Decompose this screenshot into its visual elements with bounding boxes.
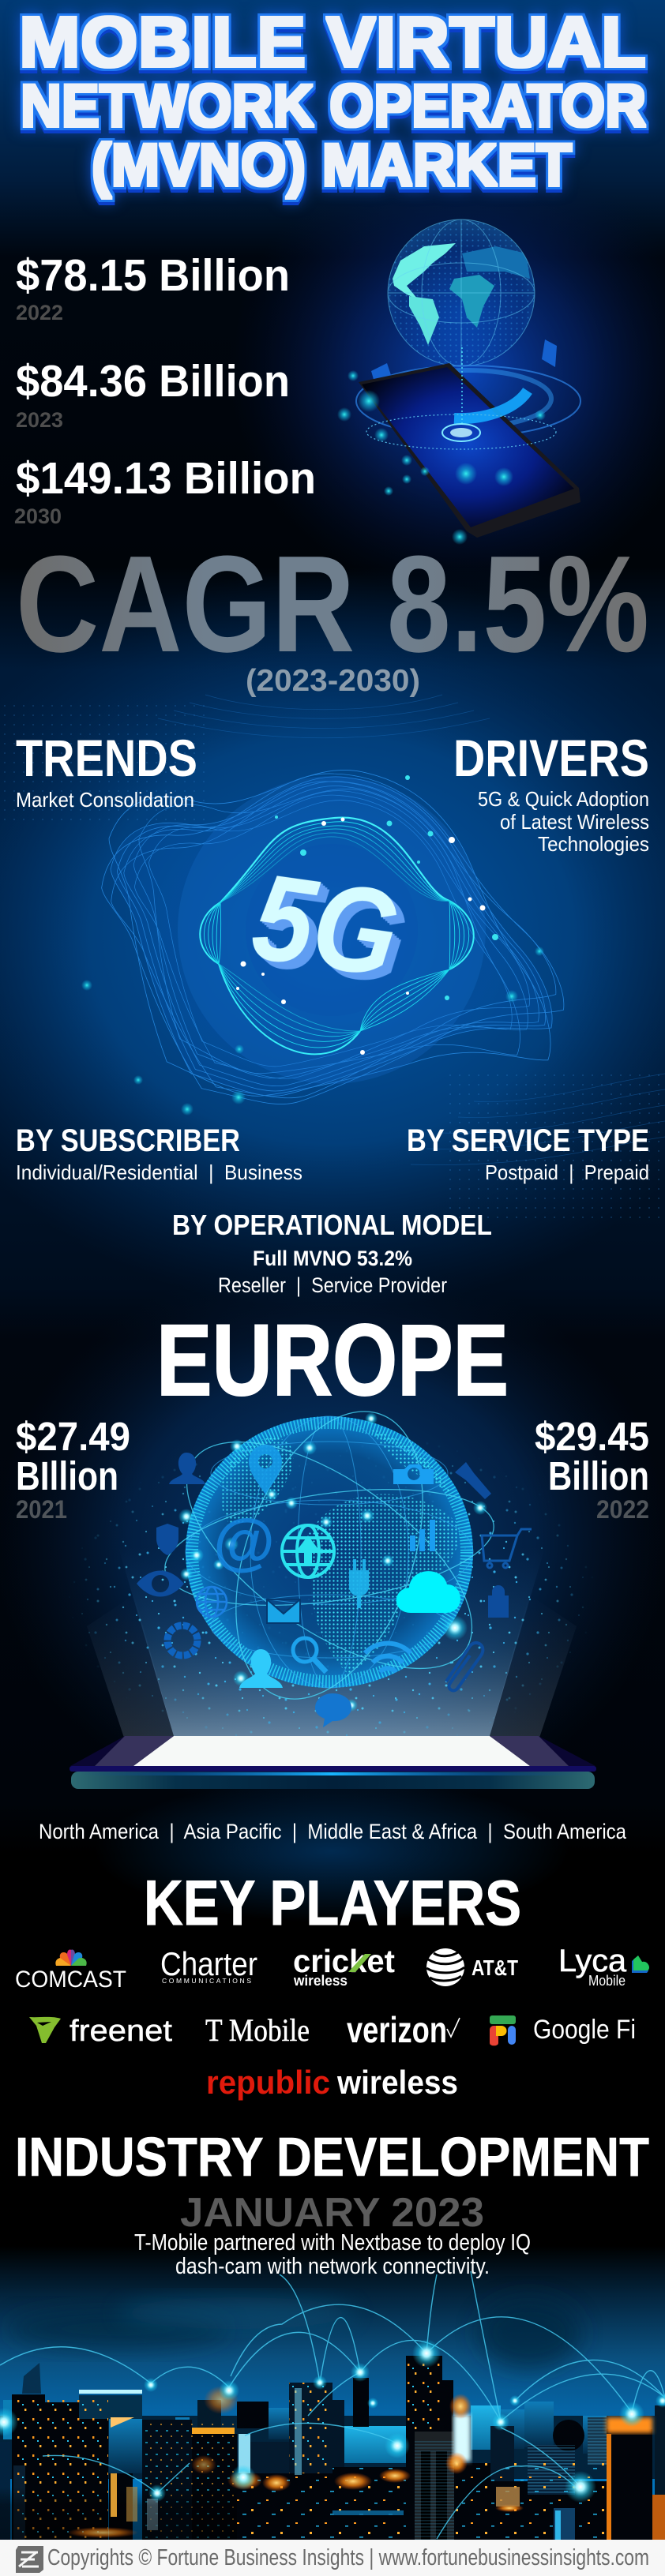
- market value 2023: 2023: [16, 408, 63, 432]
- panel: by operational model: BY OPERATIONAL MODEL: [172, 1209, 492, 1241]
- icon: lock: [489, 1586, 508, 1617]
- panel: drivers: [453, 729, 649, 856]
- panel: by subscriber: Individual/Residential | Business: [16, 1161, 302, 1184]
- title: MOBILE VIRTUAL: [19, 3, 646, 82]
- icon: envelope: [267, 1599, 300, 1623]
- dark buildings: [0, 2356, 665, 2540]
- icon: at sign: @: [213, 1506, 275, 1577]
- Europe value 2022: $29.45: [535, 1414, 649, 1459]
- title: [19, 3, 646, 199]
- logo: Verizon: verizon: [347, 2009, 447, 2050]
- development text: [134, 2230, 531, 2279]
- market value 2030: $149.13 Billion: [16, 453, 316, 504]
- market value 2022: 2022: [16, 301, 63, 324]
- Europe value 2021: 2021: [16, 1495, 67, 1524]
- logo: Freenet: freenet: [70, 2015, 172, 2048]
- market value 2030: [14, 453, 316, 528]
- icon: Fortune Business Insights logo: [16, 2546, 43, 2573]
- logo: T-Mobile: T Mobile: [205, 2012, 310, 2048]
- logo: Google Fi: [490, 2015, 636, 2045]
- logo: AT&T: AT&T: [472, 1955, 518, 1980]
- title: NETWORK OPERATOR: [21, 73, 646, 140]
- logo: Lyca Mobile: [558, 1944, 649, 1989]
- panel: trends: TRENDS: [16, 729, 197, 787]
- heading: key players: KEY PLAYERS: [144, 1868, 521, 1939]
- logo: Lyca Mobile: Mobile: [588, 1973, 626, 1989]
- concentric discs: [178, 776, 486, 1084]
- icon: chat bubble: [315, 1693, 351, 1727]
- building windows: [12, 2360, 607, 2540]
- Europe value 2021: [16, 1414, 130, 1524]
- phone hologram details: [337, 347, 556, 545]
- icon: eye: [137, 1571, 184, 1596]
- icon: paperclip: [446, 1643, 483, 1690]
- panel: drivers: of Latest Wireless: [500, 810, 649, 834]
- footer: [0, 2540, 665, 2576]
- logo: Lyca Mobile: Lyca: [558, 1944, 627, 1978]
- icon: bars: [410, 1520, 435, 1551]
- market value 2022: [16, 250, 290, 324]
- panel: by operational model: Full MVNO 53.2%: [253, 1247, 412, 1270]
- 5G lettering: 5G: [245, 847, 407, 1003]
- panel: by subscriber: BY SUBSCRIBER: [16, 1123, 240, 1158]
- market value 2023: $84.36 Billion: [16, 356, 290, 407]
- icon: shield: [156, 1524, 178, 1555]
- logo: Republic Wireless: [206, 2064, 458, 2101]
- icon: small globe: [197, 1587, 227, 1617]
- illustration: connected city skyline: [0, 2246, 665, 2540]
- panel: trends: [16, 729, 197, 812]
- market value 2030: 2030: [14, 504, 62, 528]
- icon: location pin: [249, 1445, 282, 1494]
- icon: world globe: [388, 219, 535, 366]
- CAGR period: (2023-2030): [246, 664, 420, 698]
- icon: wrench: [455, 1462, 491, 1499]
- development text: T-Mobile partnered with Nextbase to deploy IQ: [134, 2230, 531, 2255]
- bottom darkness: [0, 2487, 237, 2540]
- logo: Comcast: [15, 1950, 126, 1993]
- icon: cloud: [396, 1571, 460, 1613]
- logo: Cricket: cricket: [293, 1943, 395, 1979]
- logo: Charter: COMMUNICATIONS: [162, 1977, 251, 1985]
- logo: Republic Wireless: wireless: [336, 2064, 458, 2101]
- illustration: globe over phone: [337, 219, 580, 545]
- bright highlights: [67, 2386, 665, 2540]
- icon: plug: [349, 1559, 369, 1608]
- outer wave blob: [80, 742, 581, 1131]
- Europe value 2021: BIllion: [16, 1453, 118, 1498]
- logo: Charter: Charter: [160, 1945, 257, 1982]
- title: (MVNO) MARKET: [92, 132, 572, 199]
- cyan wave ring: [200, 818, 474, 1054]
- illustration: dotted globe: [164, 1411, 494, 1712]
- panel: by subscriber: [16, 1123, 302, 1184]
- icon: cart: [482, 1529, 532, 1568]
- illustration: 5G waves: [80, 695, 665, 1165]
- illustration: tablet: [70, 1736, 596, 1789]
- market value 2023: [16, 356, 290, 432]
- logo: Google Fi: Google Fi: [533, 2015, 636, 2045]
- icon: person: [239, 1649, 283, 1688]
- logo: Cricket: wireless: [293, 1973, 348, 1989]
- lit background buildings: [0, 2400, 665, 2479]
- Europe value 2022: 2022: [596, 1495, 649, 1524]
- dotted wave texture: [158, 695, 665, 1165]
- icon: gear: [167, 1625, 197, 1655]
- panel: by operational model: Reseller | Service Provider: [218, 1273, 447, 1297]
- icon: smartphone: [359, 363, 580, 538]
- night sky: [0, 2246, 665, 2540]
- holographic rings: [356, 339, 580, 437]
- logo: Republic Wireless: republic: [206, 2064, 330, 2101]
- logo: AT&T: [426, 1948, 518, 1986]
- icon: magnifier: [293, 1638, 326, 1672]
- development text: dash-cam with network connectivity.: [175, 2254, 490, 2279]
- panel: by operational model: [172, 1209, 492, 1297]
- network arcs: [0, 2271, 665, 2539]
- panel: by service type: [407, 1123, 649, 1184]
- illustration: light beams from tablet: [87, 1547, 577, 1766]
- icon: camera: [393, 1464, 434, 1484]
- icon: wifi: [365, 1644, 411, 1672]
- logo: Freenet: [29, 2015, 172, 2048]
- panel: drivers: 5G & Quick Adoption: [478, 787, 649, 811]
- panel: trends: Market Consolidation: [16, 788, 194, 812]
- particle field: [73, 1443, 588, 1736]
- network nodes: [0, 2339, 665, 2503]
- panel: drivers: Technologies: [538, 832, 649, 856]
- market value 2022: $78.15 Billion: [16, 250, 290, 301]
- icon: web globe with arrow: [282, 1525, 334, 1577]
- icon: headset user: [169, 1453, 205, 1484]
- Europe value 2021: $27.49: [16, 1414, 130, 1459]
- logo: Comcast: COMCAST: [15, 1967, 126, 1993]
- Europe value 2022: [535, 1414, 649, 1524]
- development date: JANUARY 2023: [180, 2190, 484, 2236]
- panel: by service type: Postpaid | Prepaid: [485, 1161, 649, 1184]
- sparkle dots: [81, 775, 544, 1116]
- heading: Europe: EUROPE: [156, 1304, 509, 1417]
